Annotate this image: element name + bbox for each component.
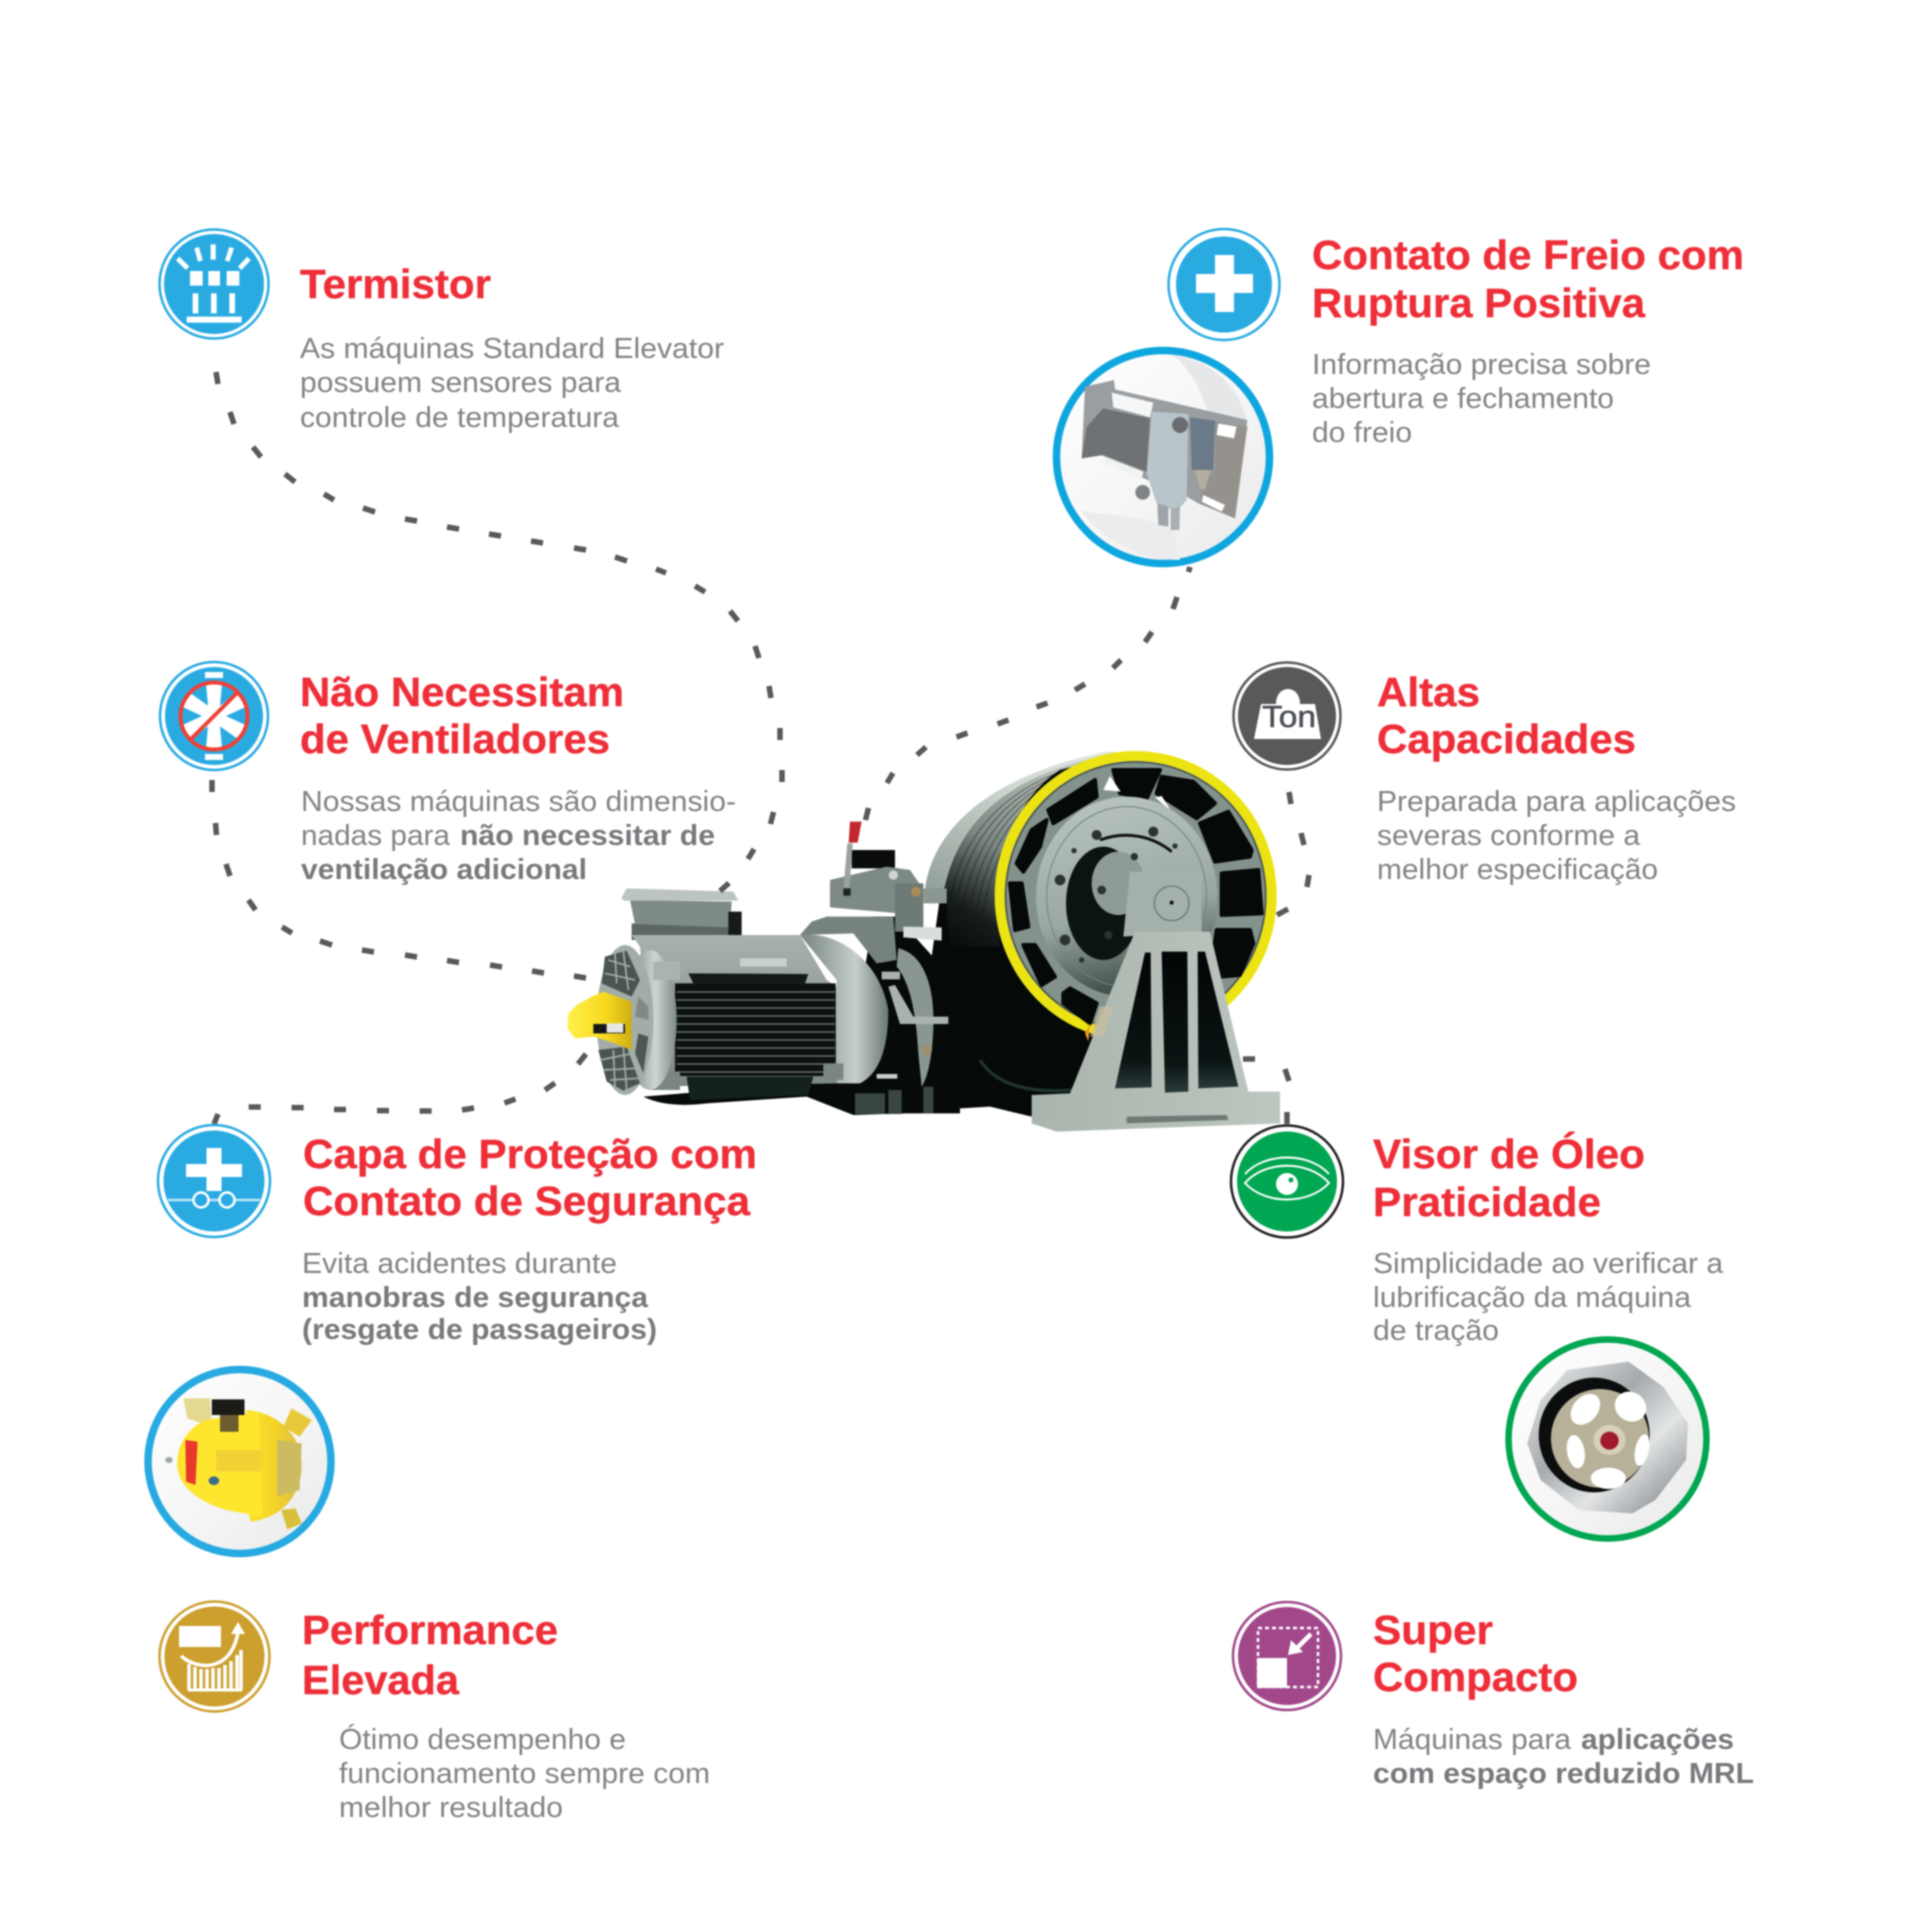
pedestal	[1032, 932, 1280, 1132]
heading: Super	[1373, 1607, 1493, 1653]
description	[339, 1723, 710, 1824]
description: controle de temperatura	[300, 402, 620, 434]
panel: Altas Capacidades	[1234, 662, 1736, 886]
description: Ótimo desempenho e	[339, 1723, 626, 1756]
heading: Capacidades	[1377, 716, 1636, 762]
icon: thermistor	[160, 230, 268, 338]
description: melhor especificação	[1377, 854, 1658, 886]
description: funcionamento sempre com	[339, 1758, 710, 1790]
icon: ton weight: Ton	[1262, 699, 1316, 734]
description	[1377, 786, 1736, 886]
description: As máquinas Standard Elevator	[300, 333, 724, 365]
description	[1373, 1724, 1754, 1790]
photo: yellow protective cover	[148, 1370, 331, 1554]
description: manobras de segurança	[302, 1282, 649, 1314]
flange	[800, 934, 888, 1083]
heading	[300, 669, 624, 762]
connector: brake contact to machine	[866, 567, 1190, 820]
connector: oil sight to machine	[1243, 1059, 1289, 1124]
panel: Visor de Óleo	[1231, 1126, 1724, 1538]
heading: Contato de Freio com	[1312, 232, 1744, 278]
icon: compact square	[1233, 1602, 1341, 1710]
motor, brake and yellow cover	[567, 822, 960, 1115]
sheave drum and wheel	[920, 752, 1280, 1132]
brake unit	[852, 850, 895, 868]
heading: Praticidade	[1373, 1179, 1601, 1225]
panel: Performance Elevada	[160, 1602, 710, 1824]
panel: Não Necessitam de Ventiladores	[160, 662, 736, 886]
motor body	[632, 935, 837, 1087]
heading: Performance	[302, 1607, 558, 1653]
description: ventilação adicional	[301, 854, 587, 886]
description: nadas para	[301, 820, 451, 852]
description	[1312, 349, 1651, 449]
icon: ton weight	[1234, 662, 1340, 770]
description: Simplicidade ao verificar a	[1373, 1248, 1724, 1280]
photo: oil sight glass	[1508, 1340, 1706, 1538]
connector: capacity to machine	[1277, 792, 1309, 915]
heading	[303, 1131, 757, 1224]
heading: Capa de Proteção com	[303, 1131, 757, 1177]
heading: Termistor	[300, 261, 491, 307]
heading	[1312, 232, 1744, 326]
description: abertura e fechamento	[1312, 383, 1614, 415]
terminal box	[632, 923, 740, 940]
description: Evita acidentes durante	[302, 1248, 617, 1280]
description	[301, 786, 736, 886]
description: Máquinas para	[1373, 1724, 1572, 1756]
panel: Contato de Freio	[1056, 229, 1744, 564]
description: de tração	[1373, 1315, 1499, 1347]
heading: Ruptura Positiva	[1312, 280, 1646, 326]
connector: Termistor to machine	[216, 372, 782, 891]
icon: performance chart	[160, 1602, 270, 1712]
panel: Termistor	[160, 230, 724, 434]
description: Nossas máquinas são dimensio-	[301, 786, 736, 818]
icon: eye	[1231, 1126, 1343, 1238]
yellow cap	[567, 992, 632, 1050]
heading: Visor de Óleo	[1373, 1131, 1645, 1177]
description: não necessitar de	[460, 820, 715, 852]
red lever handle	[849, 822, 862, 843]
heading: de Ventiladores	[300, 716, 610, 762]
heading: Elevada	[302, 1657, 460, 1703]
heading: Altas	[1377, 669, 1480, 715]
description: melhor resultado	[339, 1792, 563, 1824]
description	[1373, 1248, 1724, 1347]
description: (resgate de passageiros)	[302, 1314, 657, 1346]
heading	[302, 1607, 558, 1703]
fan cover	[597, 945, 653, 1095]
description: severas conforme a	[1377, 820, 1641, 852]
bearing block	[1123, 872, 1202, 937]
heading	[1373, 1607, 1578, 1700]
heading	[1377, 669, 1636, 762]
cooling fins	[675, 983, 836, 1076]
panel: Capa de Proteção	[148, 1125, 757, 1554]
description	[302, 1248, 657, 1346]
heading: Contato de Segurança	[303, 1178, 751, 1224]
connector: protective cover to machine	[214, 1054, 586, 1124]
description: lubrificação da máquina	[1373, 1282, 1692, 1314]
icon: no fan	[160, 662, 268, 770]
panel: Super Compacto	[1233, 1602, 1754, 1790]
central traction machine illustration	[567, 752, 1280, 1132]
description: Informação precisa sobre	[1312, 349, 1651, 381]
icon: safety cover contact	[158, 1125, 270, 1237]
connector: ventilation to machine	[212, 780, 586, 978]
description	[300, 333, 724, 434]
heading: Não Necessitam	[300, 669, 624, 715]
description: possuem sensores para	[300, 367, 622, 399]
description: com espaço reduzido MRL	[1373, 1758, 1754, 1790]
description: Preparada para aplicações	[1377, 786, 1736, 818]
end bell	[623, 950, 677, 1090]
heading: Compacto	[1373, 1654, 1578, 1700]
icon: plus	[1168, 229, 1280, 340]
brake ring and struts	[897, 948, 933, 1087]
description: do freio	[1312, 417, 1412, 449]
photo: brake contact switch	[1056, 350, 1270, 564]
heading	[1373, 1131, 1645, 1225]
description: aplicações	[1581, 1724, 1734, 1756]
